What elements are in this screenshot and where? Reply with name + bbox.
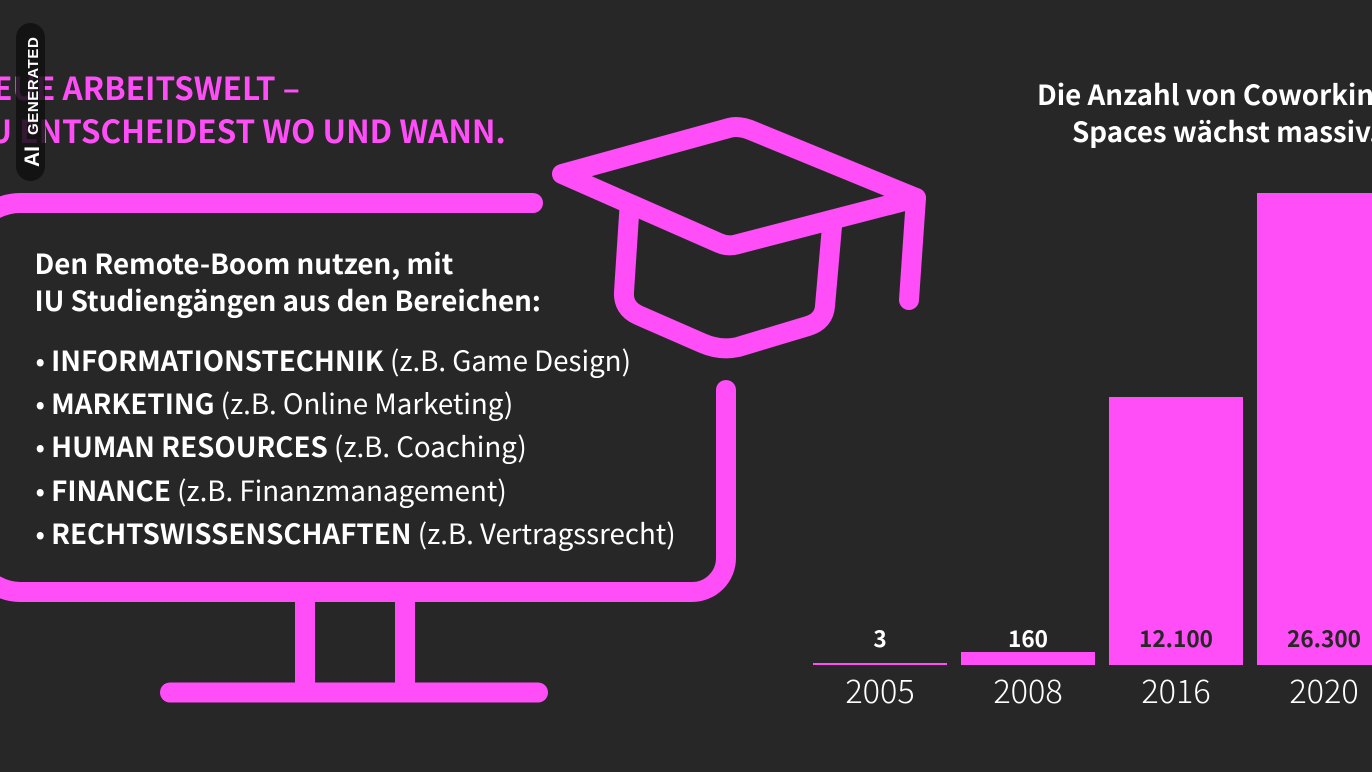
value: 3: 3: [873, 621, 887, 654]
year: 2016: 2016: [1141, 666, 1211, 713]
year: 2020: 2020: [1289, 666, 1359, 713]
badge: AI generated: AI: [21, 146, 44, 167]
bar: 2005: [813, 663, 947, 665]
title: [0, 64, 506, 153]
value: 160: 160: [1008, 621, 1048, 654]
list of study areas: • FINANCE (z.B. Finanzmanagement): [36, 469, 507, 509]
badge: AI generated: [16, 23, 45, 181]
bar: 2020: [1257, 193, 1372, 665]
bar: 2016: [1109, 397, 1243, 665]
list of study areas: • RECHTSWISSENSCHAFTEN (z.B. Vertragssrecht): [36, 512, 676, 552]
list of study areas: [36, 339, 676, 552]
list of study areas: • HUMAN RESOURCES (z.B. Coaching): [36, 425, 527, 465]
bar chart: [813, 193, 1372, 713]
text block: remote boom heading: [34, 242, 541, 319]
year: 2005: 2005: [845, 666, 915, 713]
text block: remote boom heading: Den Remote-Boom nutzen, mit: [34, 242, 453, 282]
value: 12.100: 12.100: [1139, 621, 1213, 654]
chart heading: [1037, 73, 1372, 150]
bar: 2008: [961, 652, 1095, 665]
text block: remote boom heading: IU Studiengängen aus den Bereichen:: [34, 279, 541, 319]
list of study areas: • INFORMATIONSTECHNIK (z.B. Game Design): [36, 339, 631, 379]
list of study areas: • MARKETING (z.B. Online Marketing): [36, 382, 513, 422]
badge: AI generated: GENERATED: [25, 37, 42, 135]
year: 2008: 2008: [993, 666, 1063, 713]
value: 26.300: 26.300: [1287, 621, 1361, 654]
chart heading: Spaces wächst massiv.: [1072, 110, 1372, 150]
